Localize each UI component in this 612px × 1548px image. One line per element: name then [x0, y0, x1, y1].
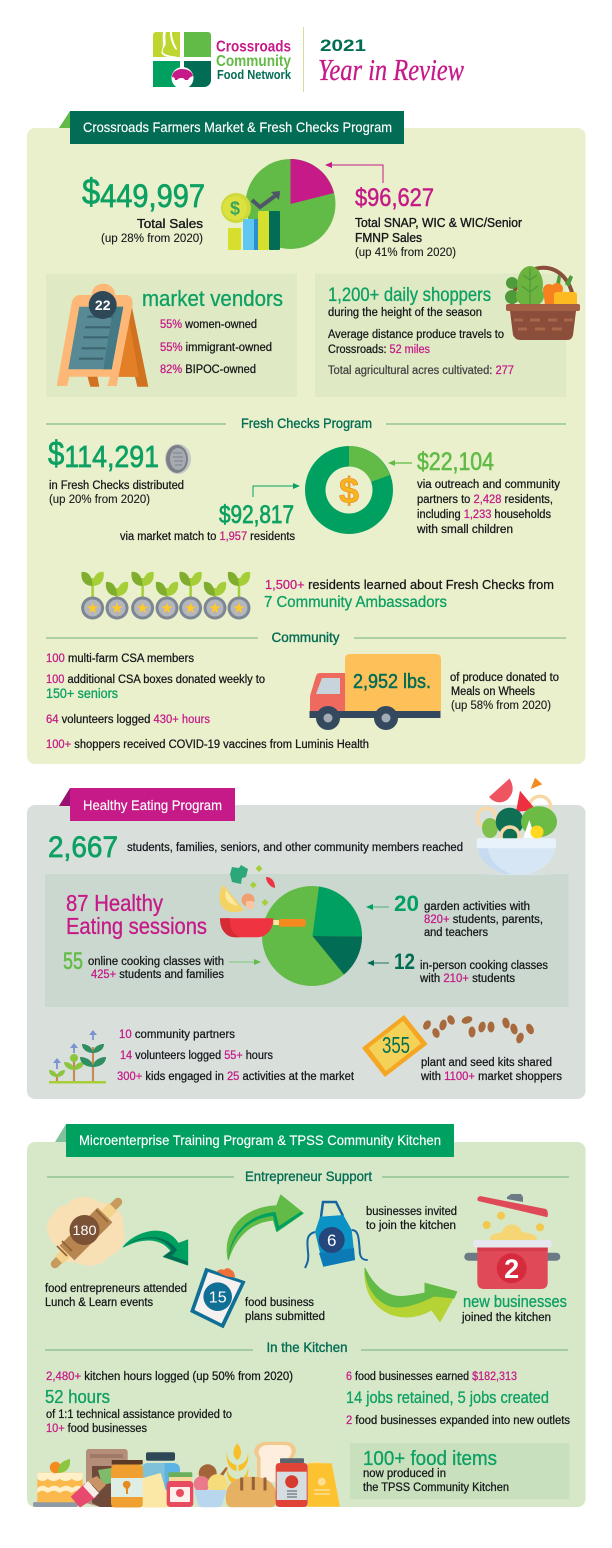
section banner: Crossroads Farmers Market & Fresh Checks Program [83, 119, 392, 135]
online cooking classes [63, 948, 261, 981]
community list: 150+ seniors [46, 685, 118, 701]
logo wordmark: Food Network [217, 67, 292, 82]
kitchen stats, left: 2,480+ kitchen hours logged (up 50% from 2020) [46, 1371, 293, 1383]
logo mark [153, 32, 211, 89]
box: shoppers and distance: Average distance produce travels to [328, 329, 504, 341]
market match figure: $92,817 [219, 501, 294, 529]
icon: frying pan with food [219, 865, 306, 937]
donated produce text [450, 672, 559, 712]
icon: rolling pin on dough, 180 [47, 1197, 124, 1266]
community list: 100 additional CSA boxes donated weekly to [46, 674, 265, 686]
people reached figure: 2,667 [48, 831, 118, 864]
section banner: Healthy Eating Program [83, 797, 222, 813]
outreach figure [416, 448, 560, 536]
logo wordmark [216, 38, 292, 82]
vendors text: 82% BIPOC-owned [160, 364, 256, 376]
box: shoppers and distance: during the height of the season [328, 307, 482, 319]
text: Lunch and Learn [45, 1283, 187, 1309]
sessions heading: 87 Healthy [66, 890, 163, 916]
kitchen stats, right: 2 food businesses expanded into new outlets [346, 1415, 570, 1427]
market match figure: via market match to 1,957 residents [120, 531, 295, 543]
SNAP and WIC sales figure: FMNP Sales [355, 231, 422, 245]
donut chart: Fresh Checks split [305, 446, 393, 534]
garden activities: 20 [394, 891, 419, 916]
icon: apron 6: 6 [327, 1231, 336, 1250]
text: businesses invited: businesses invited [366, 1206, 457, 1218]
arrow: entrepreneurs to business plans [123, 1231, 188, 1265]
bread loaf [226, 1477, 277, 1507]
Fresh Checks distributed figure: in Fresh Checks distributed [49, 480, 184, 492]
icon: seeds [421, 1014, 535, 1044]
community list: 100+ shoppers received COVID-19 vaccines from Luminis Health [46, 739, 369, 751]
ambassadors text: 1,500+ residents learned about Fresh Checks from [265, 577, 554, 592]
text: business plans: food business [245, 1297, 314, 1309]
Fresh Checks distributed figure: (up 20% from 2020) [49, 494, 150, 506]
text: businesses invited: to join the kitchen [366, 1220, 456, 1232]
icon: seven sprouting coins [81, 572, 250, 620]
cake [33, 1459, 83, 1507]
box: shoppers and distance: 1,200+ daily shoppers [328, 285, 491, 306]
callout: 100+ food items: 100+ food items [363, 1448, 497, 1470]
icon: delivery truck with 2,952 lbs: 2,952 lbs. [353, 671, 431, 693]
section banner [59, 111, 404, 144]
box: shoppers and distance [315, 274, 566, 397]
SNAP and WIC sales figure: $96,627 [355, 184, 434, 212]
donated produce text: Meals on Wheels [451, 686, 535, 698]
logo wordmark: Crossroads [216, 38, 291, 56]
icon: sandwich board with 22: 22 [95, 297, 111, 313]
online cooking classes: 55 [63, 948, 83, 975]
text: Lunch and Learn: food entrepreneurs attended [45, 1283, 187, 1295]
partners and volunteers list: 10 community partners [119, 1029, 235, 1041]
header: logo and title [153, 27, 464, 92]
icon: cooking pot 2 [464, 1194, 560, 1289]
seed kits text [420, 1057, 562, 1083]
wheat [227, 1443, 248, 1485]
pouch [86, 1449, 128, 1507]
icon: vegetable basket [505, 266, 580, 340]
kitchen stats, left: 52 hours [45, 1387, 110, 1407]
vendors text: 55% immigrant-owned [160, 342, 272, 354]
online cooking classes: 425+ students and families [91, 969, 224, 981]
ambassadors text: 7 Community Ambassadors [264, 594, 447, 611]
icon: clipboard 15 [191, 1268, 245, 1328]
ambassadors text [264, 577, 554, 611]
text: new businesses [461, 1292, 567, 1324]
total sales figure: Total Sales [137, 216, 204, 231]
SNAP and WIC sales figure: (up 41% from 2020) [355, 247, 456, 259]
garden activities: garden activities with [424, 901, 530, 913]
total sales figure [82, 171, 205, 245]
subheading: Fresh Checks Program: Fresh Checks Program [241, 415, 372, 431]
community list [46, 653, 369, 751]
seed kits text: with 1100+ market shoppers [420, 1071, 562, 1083]
sessions heading: Eating sessions [66, 913, 207, 939]
people reached figure [48, 831, 463, 864]
in-person cooking classes: 12 [394, 949, 415, 974]
callout: 100+ food items: now produced in [363, 1468, 446, 1480]
in-person cooking classes: with 210+ students [419, 973, 515, 985]
community list: 100 multi-farm CSA members [46, 653, 194, 665]
Fresh Checks distributed figure: $ [48, 435, 64, 473]
outreach figure: with small children [416, 524, 513, 536]
text: business plans [245, 1297, 325, 1323]
box: shoppers and distance: Total agricultural acres cultivated: 277 [328, 365, 514, 377]
icon: seven sprouting coins: ★ [110, 600, 124, 617]
outreach figure: via outreach and community [417, 479, 560, 491]
partners and volunteers list: 14 volunteers logged 55+ hours [120, 1050, 273, 1062]
kitchen stats, right: 6 food businesses earned $182,313 [346, 1371, 517, 1383]
icon: salad bowl [477, 778, 557, 875]
title: Year in Review: Year in Review [318, 52, 464, 87]
icon: seed packet 355: 355 [382, 1032, 410, 1058]
kitchen stats, left: of 1:1 technical assistance provided to [46, 1409, 232, 1421]
vendors text: market vendors [142, 286, 283, 311]
icon: dollar sign: $ [339, 470, 359, 511]
partners and volunteers list [117, 1029, 355, 1083]
section banner [59, 788, 235, 821]
callout: 100+ food items: the TPSS Community Kitchen [363, 1482, 509, 1494]
Fresh Checks distributed figure: 114,291 [64, 439, 159, 474]
icon: row of food products [33, 1442, 340, 1508]
cheese [143, 1473, 168, 1508]
total sales figure: (up 28% from 2020) [101, 233, 203, 245]
logo wordmark: Community [216, 53, 291, 70]
box: market vendors [46, 274, 297, 397]
donated produce text: (up 58% from 2020) [451, 700, 551, 712]
vendors text: 55% women-owned [160, 319, 257, 331]
panel: Microenterprise Training and Community Kitchen [27, 1124, 586, 1508]
arrow: business plans to invitations [227, 1195, 303, 1260]
arrow: to outreach slice [388, 460, 412, 466]
online cooking classes: online cooking classes with [88, 956, 224, 968]
icon: rolling pin on dough, 180: 180 [72, 1222, 97, 1238]
sessions heading [66, 890, 207, 939]
SNAP and WIC sales figure: Total SNAP, WIC & WIC/Senior [355, 216, 522, 230]
text: Lunch and Learn: Lunch & Learn events [45, 1297, 153, 1309]
subheading: In the Kitchen: In the Kitchen [266, 1339, 348, 1355]
arrow: invitations to new businesses [365, 1268, 457, 1322]
candy bar [71, 1476, 106, 1508]
box: shoppers and distance: Crossroads: 52 miles [328, 344, 430, 356]
section banner [55, 1124, 454, 1157]
community list: 64 volunteers logged 430+ hours [46, 714, 210, 726]
honey jar [111, 1460, 143, 1508]
pie chart: total sales share [246, 159, 336, 249]
text: businesses invited [366, 1206, 457, 1232]
outreach figure: $22,104 [417, 448, 494, 476]
icon: apron 6 [305, 1202, 368, 1268]
icon: growing plants with arrows [49, 1030, 106, 1084]
icon: coin and rising bars: $ [230, 198, 240, 218]
partners and volunteers list: 300+ kids engaged in 25 activities at the market [117, 1071, 355, 1083]
Fresh Checks distributed figure [48, 435, 184, 506]
total sales figure: $ [82, 171, 100, 212]
ice cream [194, 1464, 228, 1507]
pie chart: session types [262, 886, 362, 986]
outreach figure: including 1,233 households [417, 509, 551, 521]
icon: seven sprouting coins: ★ [136, 600, 149, 617]
icon: seven sprouting coins: ★ [184, 600, 197, 617]
SNAP and WIC sales figure [355, 184, 522, 259]
icon: coin and rising bars [221, 191, 280, 250]
tomato sauce jar [276, 1458, 308, 1507]
text: new businesses: joined the kitchen [461, 1312, 551, 1324]
jam jar [167, 1472, 193, 1507]
kitchen stats, left [45, 1371, 293, 1435]
garden activities [366, 891, 543, 939]
title: 2021: 2021 [320, 36, 366, 55]
blue jar [142, 1452, 180, 1490]
people reached figure: students, families, seniors, and other community members reached [127, 842, 463, 854]
garden activities: 820+ students, parents, [424, 914, 543, 926]
icon: seven sprouting coins: ★ [160, 600, 174, 617]
callout: 100+ food items [350, 1443, 570, 1499]
icon: seven sprouting coins: ★ [208, 600, 222, 617]
icon: sandwich board with 22 [57, 284, 148, 387]
icon: seven sprouting coins: ★ [86, 600, 99, 617]
icon: seven sprouting coins: ★ [232, 600, 246, 617]
icon: delivery truck with 2,952 lbs [310, 654, 441, 730]
arrow: to SNAP slice [325, 162, 383, 183]
text: new businesses: new businesses [463, 1292, 567, 1311]
box: Healthy Eating sessions [45, 865, 568, 1007]
toast [254, 1442, 296, 1482]
subheading: Entrepreneur Support: Entrepreneur Support [245, 1168, 372, 1184]
icon: seed packet 355 [363, 1016, 426, 1076]
market match figure [120, 501, 295, 543]
icon: coin [165, 444, 191, 474]
kitchen stats, right [346, 1371, 570, 1427]
panel: Healthy Eating Program [27, 778, 586, 1099]
text: business plans: plans submitted [245, 1311, 325, 1323]
in-person cooking classes [367, 949, 548, 985]
outreach figure: partners to 2,428 residents, [417, 494, 553, 506]
seed kits text: plant and seed kits shared [421, 1057, 552, 1069]
icon: clipboard 15: 15 [209, 1290, 227, 1307]
vendors text [142, 286, 283, 376]
icon: cooking pot 2: 2 [504, 1254, 519, 1284]
section banner: Microenterprise Training Program & TPSS Community Kitchen [79, 1132, 441, 1148]
kitchen stats, right: 14 jobs retained, 5 jobs created [346, 1388, 549, 1407]
garden activities: and teachers [424, 927, 488, 939]
subheading: Community: Community [272, 629, 340, 645]
donated produce text: of produce donated to [450, 672, 559, 684]
panel: Crossroads Farmers Market and Fresh Checks [27, 111, 586, 764]
kitchen stats, left: 10+ food businesses [46, 1423, 147, 1435]
shopping bag [308, 1462, 340, 1507]
in-person cooking classes: in-person cooking classes [420, 960, 548, 972]
arrow: to donut [253, 483, 300, 497]
total sales figure: 449,997 [100, 178, 205, 214]
